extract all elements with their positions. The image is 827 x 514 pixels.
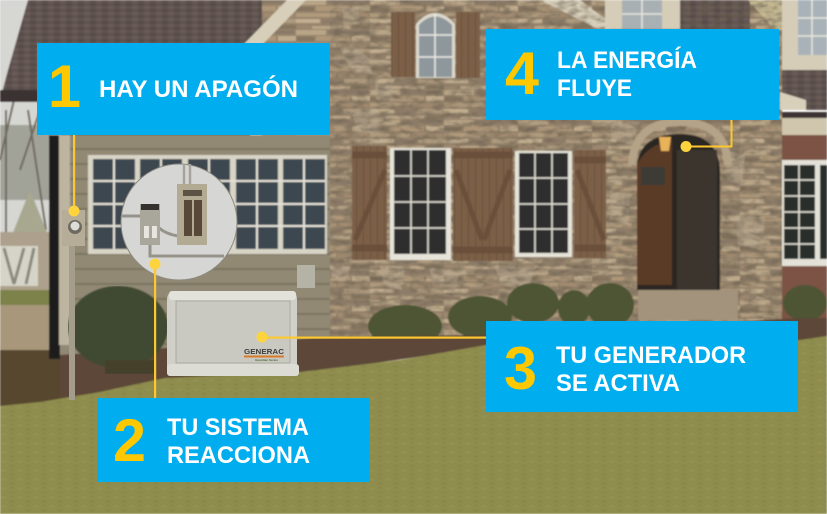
arched door	[632, 122, 738, 320]
heading 2	[167, 414, 310, 469]
upper window	[391, 12, 480, 78]
number 3: 3	[504, 335, 537, 402]
stone facade windows and shutters	[352, 12, 606, 261]
connector: step 1	[68, 135, 80, 216]
panel: step 1	[37, 43, 330, 135]
electric box on wall	[297, 265, 315, 288]
panel: step 3	[486, 321, 798, 412]
heading 2: REACCIONA	[167, 442, 310, 469]
number 1: 1	[48, 53, 81, 120]
heading 3: SE ACTIVA	[556, 370, 680, 397]
shutters	[352, 146, 606, 261]
stone wall	[262, 0, 782, 338]
right house	[605, 0, 827, 323]
gable trim left	[243, 0, 306, 45]
shrub near generator	[68, 286, 168, 374]
heading 1: HAY UN APAGÓN	[99, 75, 298, 103]
generator logo: GENERAC	[244, 347, 285, 356]
heading 4: LA ENERGÍA	[557, 46, 697, 74]
bushes	[368, 283, 827, 347]
number 4: 4	[505, 40, 540, 107]
connector: step 2	[150, 258, 160, 398]
generator logo	[244, 347, 285, 362]
generator logo: Guardian Series	[255, 358, 278, 362]
panel: step 2	[97, 398, 370, 482]
transfer switch	[140, 204, 160, 245]
heading 2: TU SISTEMA	[167, 414, 309, 441]
heading 4: FLUYE	[557, 75, 632, 102]
main breaker panel	[177, 184, 207, 245]
gutter and trim	[49, 135, 70, 359]
sky and left background	[0, 0, 62, 410]
roof	[0, 0, 290, 135]
texture overlay on stone	[330, 0, 782, 338]
upper roofline right	[540, 0, 782, 30]
siding window group	[88, 155, 327, 254]
heading 3	[556, 342, 746, 397]
panel: step 4	[486, 29, 779, 120]
large stones	[330, 6, 765, 290]
connector: step 3	[256, 332, 486, 342]
callout: magnified electrical panels	[121, 164, 237, 280]
heading 4	[557, 46, 697, 102]
connector: step 4	[680, 120, 732, 152]
icon: electric meter and conduit	[62, 210, 85, 400]
mulch bed	[60, 318, 827, 400]
siding wall	[60, 135, 330, 360]
heading 3: TU GENERADOR	[556, 342, 746, 369]
number 2: 2	[113, 407, 146, 474]
lawn	[0, 336, 827, 514]
generator	[167, 291, 299, 376]
lower windows	[390, 148, 572, 260]
